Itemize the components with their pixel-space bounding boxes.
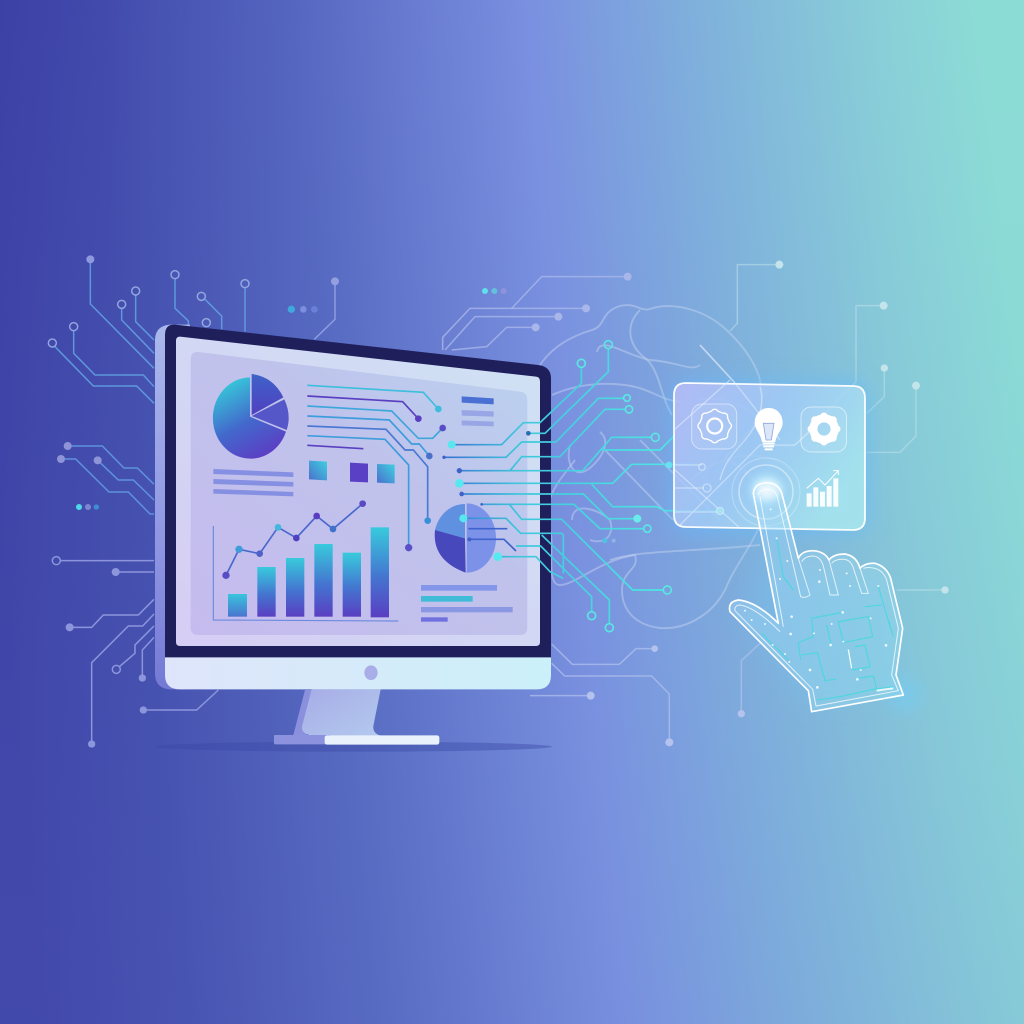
circuit lines on dashboard <box>307 385 446 551</box>
icon: solid gear <box>801 407 846 452</box>
screen <box>176 337 540 646</box>
hand circuit lines <box>762 538 893 700</box>
text lines under pie chart <box>213 469 293 496</box>
line chart <box>222 500 366 579</box>
monitor bezel <box>165 325 551 658</box>
touch ripple rings <box>732 458 800 526</box>
icon: rising bar chart <box>807 471 838 507</box>
fingertip glow <box>755 480 781 500</box>
hand outline <box>729 483 903 712</box>
circuit trace and dots: top centre <box>288 277 339 339</box>
dashboard panel <box>191 352 527 635</box>
pie chart: top left <box>213 374 289 459</box>
status dots: left <box>76 504 99 510</box>
hand circuit dots <box>744 508 887 689</box>
monitor <box>155 325 552 752</box>
circuit traces: top right of monitor <box>443 273 632 350</box>
circuit traces: far right <box>730 261 949 594</box>
circuit traces: left lower <box>52 557 218 748</box>
icon: outline gear <box>692 404 737 449</box>
glow behind touch panel and hand <box>672 382 919 710</box>
circuit traces: monitor to touch panel <box>442 341 717 632</box>
touch panel <box>674 345 865 530</box>
circuit traces: lower right <box>530 643 760 746</box>
brain outline <box>538 305 790 628</box>
coloured squares <box>309 461 395 483</box>
text lines lower right <box>421 585 513 622</box>
pie chart: lower right <box>435 503 496 573</box>
monitor base <box>155 735 552 752</box>
monitor chin <box>165 657 551 689</box>
text lines top right <box>462 396 494 426</box>
circuit nodes <box>442 341 672 632</box>
monitor stand <box>293 689 381 736</box>
bar chart <box>213 526 398 621</box>
circuit traces: left upper <box>48 255 249 403</box>
circuit traces: left middle <box>57 442 154 514</box>
hand <box>729 483 903 712</box>
icon: light bulb <box>755 408 783 449</box>
panel background traces <box>674 345 822 528</box>
monitor side edge <box>155 325 190 689</box>
hand inner outline <box>735 489 898 706</box>
